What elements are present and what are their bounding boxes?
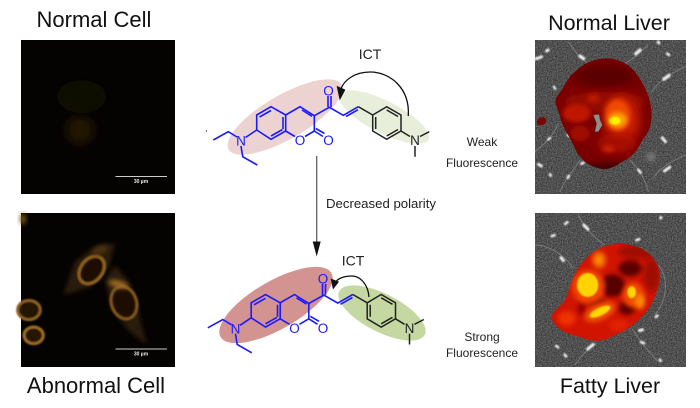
- dimethylaminostyryl black part: [353, 294, 424, 344]
- chemical structure: strong fluorescence state: [208, 252, 433, 358]
- scale bar: [116, 349, 167, 358]
- arrow: decreased polarity down arrow: [313, 156, 321, 256]
- atom labels: O: [323, 84, 334, 98]
- scale bar: [116, 176, 167, 185]
- atom labels: O: [295, 133, 305, 148]
- coumarin ketone blue part: [208, 284, 353, 353]
- stray dot: [206, 130, 207, 132]
- atom labels: O: [318, 271, 328, 286]
- panel: normal liver image: [534, 40, 686, 194]
- atom labels: O: [318, 321, 328, 336]
- title: Abnormal Cell: Abnormal Cell: [27, 373, 165, 398]
- acceptor highlight: [209, 252, 343, 358]
- atom labels: [236, 84, 420, 148]
- atom labels: N: [405, 321, 414, 336]
- atom labels: N: [236, 134, 246, 148]
- chemical structure: weak fluorescence state: [206, 65, 436, 169]
- acceptor highlight: [218, 65, 352, 169]
- donor highlight: [332, 80, 436, 154]
- label: ICT top: ICT: [359, 46, 382, 62]
- panel: normal cell micrograph: [21, 40, 175, 194]
- atom labels: N: [231, 321, 240, 336]
- title: Normal Cell: Normal Cell: [37, 7, 151, 32]
- atom labels: [231, 271, 414, 336]
- dimethylaminostyryl black part: [358, 107, 429, 157]
- label: weak fluorescence: [446, 135, 518, 170]
- label: weak fluorescence: Fluorescence: [446, 156, 518, 170]
- label: ICT bottom: ICT: [342, 252, 365, 268]
- atom labels: N: [410, 133, 420, 148]
- atom labels: O: [323, 133, 334, 148]
- panel: abnormal cell micrograph: [18, 213, 175, 367]
- scale bar: 30 µm: [134, 352, 149, 358]
- label: weak fluorescence: Weak: [467, 135, 498, 149]
- atom labels: O: [289, 321, 300, 336]
- label: strong fluorescence: Fluorescence: [446, 346, 518, 360]
- label: decreased polarity: Decreased polarity: [326, 196, 436, 211]
- donor highlight: [331, 274, 433, 352]
- label: strong fluorescence: [446, 330, 518, 360]
- title: Fatty Liver: Fatty Liver: [560, 374, 660, 398]
- scale bar: 30 µm: [134, 179, 149, 185]
- arrow: ICT curved, top molecule: [338, 72, 408, 116]
- panel: fatty liver image: [535, 213, 686, 367]
- arrow: ICT curved, bottom molecule: [332, 276, 369, 297]
- label: strong fluorescence: Strong: [464, 330, 500, 344]
- coumarin ketone blue part: [213, 96, 358, 165]
- title: Normal Liver: Normal Liver: [548, 11, 670, 35]
